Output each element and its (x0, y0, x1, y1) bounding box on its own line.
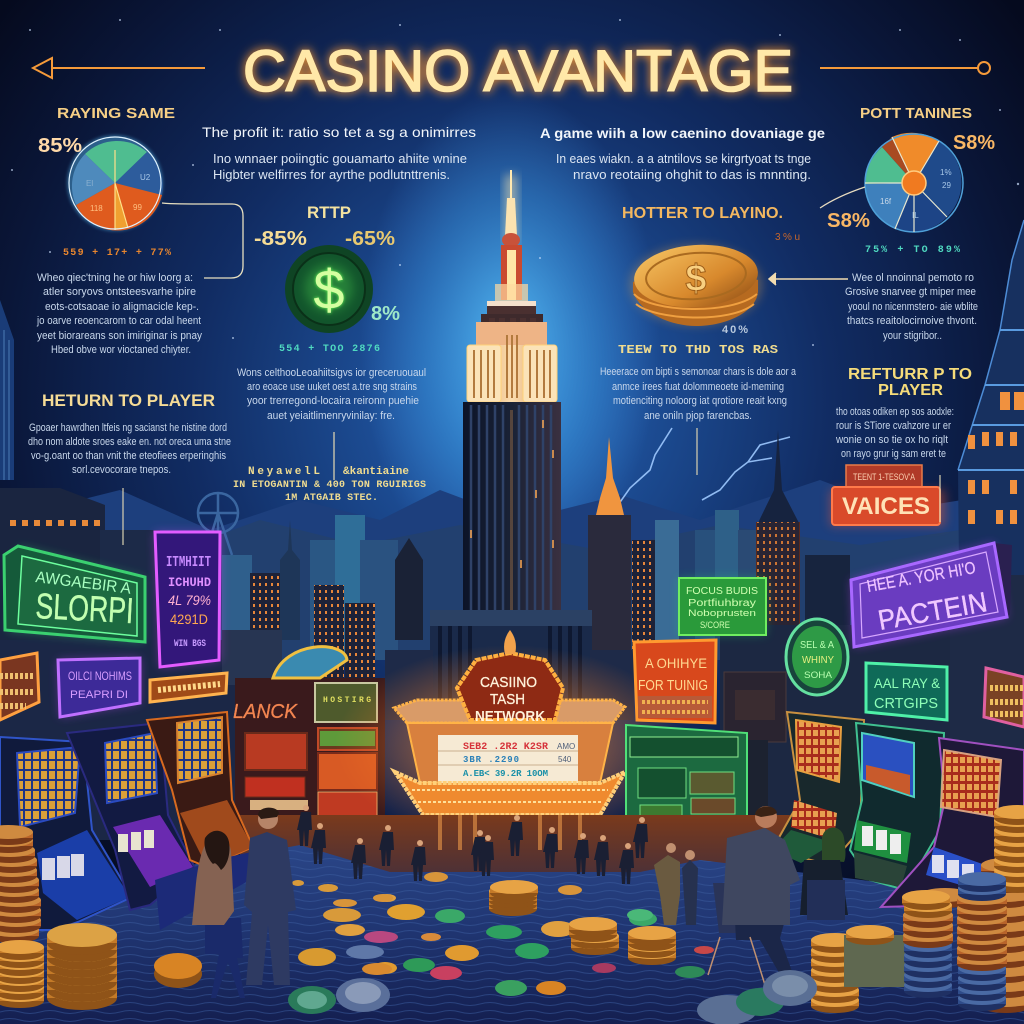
rtp body: auet yeiaitlimenryvinilay: fre. (267, 410, 395, 422)
rtp body: Wons celthooLeoahiitsigvs ior greceruouaul (237, 367, 426, 379)
text block: low casino advantage: nravo reotaiing ohghit to das is mnnting. (573, 168, 811, 182)
body text (36, 272, 202, 356)
callout: neyawell: &kantiaine (343, 466, 409, 478)
body: yooul no nicenmstero- aie wblite (848, 301, 978, 313)
rtp body: yoor trerregond-locaira reironn puehie (247, 395, 419, 407)
neon sign: purple tall: ITMHIIT (166, 554, 211, 571)
pie caption: 559 + 17+ + 77% (63, 248, 171, 259)
gold stack left edge (0, 825, 41, 943)
body text: eots-cotsaoae io aligmacicle kep-. (45, 301, 199, 313)
colonnade under marquee (240, 815, 790, 877)
pie chart right (865, 133, 963, 232)
neon sign: purple tall: 4291D (170, 611, 208, 627)
neon sign: purple tall: ICHUHD (168, 575, 211, 590)
body text: Wheo qiec'tning he or hiw loorg a: (37, 272, 193, 284)
icon: gold coin (630, 241, 762, 326)
right edge building (958, 220, 1024, 660)
neon word: lanck: LANCK (233, 701, 299, 723)
percent 85: 85% (38, 135, 82, 157)
body (600, 366, 797, 422)
sign: vaices: VAICES (842, 493, 930, 520)
neon sign: green slorpi (4, 546, 145, 642)
neon sign: green upper center: Portfiuhbray (688, 598, 756, 609)
heading: rttp: RTTP (307, 203, 351, 222)
small percent: 3%u (775, 232, 800, 243)
percent labels (827, 132, 995, 232)
pie chart left (67, 135, 163, 231)
percent labels: -65% (345, 228, 395, 250)
panel: return to player right (835, 366, 972, 460)
body: rour is STiore cvahzore ur er (836, 420, 951, 432)
blue and gold stacks front right (697, 872, 1007, 1024)
text block: low casino advantage: A game wiih a low caenino dovaniage ge (540, 125, 825, 141)
body (835, 406, 954, 460)
body: sorl.cevocorare tnepos. (72, 464, 171, 476)
lightning (618, 428, 790, 505)
text block: low casino advantage (540, 125, 825, 182)
casino marquee: A.EB< 39.2R 10OM (463, 769, 548, 779)
body: tho otoas odiken ep sos aodxle: (836, 406, 954, 418)
arrow: to coin (769, 273, 848, 285)
secondary tower right (588, 430, 800, 690)
rtp body (237, 367, 426, 422)
pie chart right: 29 (942, 181, 951, 190)
pie chart left: 118 (90, 204, 103, 213)
panel: return to player right: PLAYER (878, 382, 943, 399)
rainbow arch sign (273, 647, 347, 678)
person: seated man and woman right (654, 806, 848, 988)
percent labels: -85% (254, 228, 307, 250)
icon: gold coin: $ (685, 258, 707, 300)
neon sign: purple right (851, 543, 1012, 647)
slot machines right (772, 712, 1024, 907)
casino marquee: TASH (490, 691, 525, 708)
body: Heeerace om bipti s semonoar chars is dole aor a (600, 366, 797, 378)
body: wonie on so tie ox ho riqlt (835, 434, 948, 446)
neon sign: orange far right (984, 668, 1024, 727)
body: motienciting noloorg iat qrotiore reait kxng (613, 395, 787, 407)
panel: hotter to laying (622, 205, 848, 336)
casino marquee (335, 630, 685, 845)
heading: REFTURR P TO (848, 366, 972, 383)
vertical pointers (123, 428, 940, 545)
neon sign: green upper center: FOCUS BUDIS (686, 586, 758, 597)
body text: yeet biorareans son imiriginar is pnay (37, 330, 202, 342)
city skyline (222, 510, 850, 683)
neon sign: green upper center (679, 578, 766, 635)
casino marquee: 3BR .2290 (463, 755, 519, 765)
rtp caption: 554 + TOO 2876 (279, 344, 380, 355)
ferris wheel (198, 493, 238, 555)
pie chart left: U2 (140, 173, 151, 182)
body: Gpoaer hawrdhen ltfeis ng sacianst he nistine dord (29, 422, 227, 434)
icon: dollar chip: $ (313, 258, 345, 321)
neon sign: round green: WHINY (802, 655, 834, 666)
sign: vaices: TEENT 1-TESOV'A (853, 472, 915, 482)
percent labels: 8% (371, 303, 400, 325)
neon sign: orange center: A OHIHYE (645, 655, 707, 671)
casino marquee: 540 (558, 755, 572, 764)
panel: raying same (36, 105, 202, 356)
body (28, 422, 231, 476)
neon sign: green slorpi: SLORPI (35, 585, 135, 631)
mountains (0, 480, 1024, 660)
body: ane oniln pjop farencbas. (644, 410, 752, 422)
tower light halo (360, 90, 660, 590)
sign: vaices (830, 465, 945, 526)
panel: return to player left (28, 391, 231, 476)
body: vo-g.oant oo than vnit the eteofiees erperinghis (31, 450, 226, 462)
percent labels: S8% (827, 210, 870, 232)
text block: profit ratio: The profit it: ratio so tet a sg a onimirres (202, 124, 476, 140)
center coin stacks (489, 880, 676, 965)
neon sign: orange center: FOR TUINIG (638, 677, 708, 694)
text block: profit ratio: Ino wnnaer poiingtic gouamarto ahiite wnine (213, 152, 467, 166)
arrow: title right (820, 62, 990, 74)
green panels building (626, 672, 786, 840)
rtp body: aro eoace use uuket oest a.tre sng strains (247, 381, 417, 393)
body (845, 272, 978, 342)
icon: dollar chip (285, 245, 373, 333)
body: Wee ol nnoinnal pemoto ro (852, 272, 974, 284)
neon sign: purple right: PACTEIN (876, 586, 989, 636)
callout: neyawell: 1M ATGAIB STEC. (285, 493, 378, 504)
heading: TEEW TO THD TOS RAS (618, 343, 778, 357)
body: thatcs reaitolocirnoive thvont. (847, 315, 977, 327)
heading: HETURN TO PLAYER (42, 391, 215, 410)
pie chart left: El (86, 179, 93, 188)
pie chart right: 16f (880, 197, 892, 206)
neon sign: small purple: PEAPRI DI (70, 689, 128, 701)
text block: low casino advantage: In eaes wiakn. a a atntilovs se kirgrtyoat ts tnge (556, 152, 811, 166)
percent labels (254, 228, 400, 325)
neon sign: orange left (0, 653, 39, 720)
neon sign: round green: SOHA (804, 670, 832, 680)
back walls behind signs (0, 575, 1024, 840)
percent 40: 40% (722, 324, 748, 336)
neon sign: green slorpi: AWGAEBIR A (35, 569, 132, 598)
callout: neyawell: IN ETOGANTIN & 400 TON RGUIRIGS (233, 480, 426, 491)
left edge buildings (0, 300, 160, 660)
icon: dollar chip: $ (313, 258, 345, 321)
left panels building (233, 647, 385, 838)
body: on rayo grur ig sam eret te (841, 448, 946, 460)
casino base building (385, 610, 634, 720)
pie chart right: IL (912, 211, 919, 220)
neon sign: purple tall: 4L 79% (168, 592, 211, 608)
casino marquee: AMO (557, 742, 575, 751)
pie chart right: 1% (940, 168, 952, 177)
panel: pott tanines (820, 105, 995, 342)
pie chart left: 99 (133, 203, 142, 212)
neon sign: orange bar (150, 673, 227, 702)
body text: atler soryovs ontsteesvarhe ipire (43, 286, 196, 298)
title: CASINO AVANTAGE (243, 39, 793, 104)
central skyscraper (463, 170, 561, 614)
neon sign: small purple: OILCI NOHIMS (68, 669, 132, 683)
body: your stigribor.. (883, 330, 942, 342)
stars (11, 19, 1019, 346)
heading: POTT TANINES (860, 105, 972, 122)
sign text: CASIINO (480, 674, 537, 691)
neon sign: purple tall (155, 532, 220, 667)
callout: neyawell (233, 432, 426, 504)
percent labels: S8% (953, 132, 995, 154)
neon sign: green rect right: AAL RAY & (874, 675, 941, 691)
body text: jo oarve reoencarom to car odal heent (36, 315, 201, 327)
arrow: title left (33, 58, 205, 78)
gold stack right edge (981, 805, 1024, 1013)
small green sign text: HOSTIRG (323, 696, 371, 705)
callout: neyawell: NeyawelL (248, 466, 320, 478)
body: dho nom aldote sroes eake en. not oreca uma stne (28, 436, 231, 448)
panel: teew to the (600, 343, 797, 422)
panel: rtp (237, 203, 426, 422)
neon sign: green rect right: CRTGIPS (874, 695, 938, 712)
neon sign: round green (786, 619, 848, 695)
text block: profit ratio: Higbter welfirres for ayrthe podlutnttrenis. (213, 168, 450, 182)
neon sign: small purple (58, 658, 140, 717)
pie caption: 75% + TO 89% (865, 245, 960, 256)
title: CASINO AVANTAGE (243, 39, 793, 104)
casino marquee: NETWORK (475, 708, 545, 725)
gold stack front left (0, 923, 117, 1010)
heading: HOTTER TO LAYINO. (622, 205, 783, 222)
small crowd (297, 805, 648, 884)
body text: Hbed obve wor vioctaned chiyter. (51, 344, 191, 356)
neon sign: purple right: HEE A. YOR HI'O (865, 558, 977, 596)
marquee lines: SEB2 .2R2 K2SR (463, 742, 548, 753)
ground (0, 845, 1024, 1024)
body: anmce irees fuat dolommeoete id-meming (612, 381, 784, 393)
neon sign: green upper center: S/CORE (700, 620, 730, 630)
body: Grosive snarvee gt miper mee (845, 286, 976, 298)
heading: raying same: RAYING SAME (57, 105, 175, 122)
chips on floor (154, 872, 714, 1014)
neon sign: orange center (634, 640, 716, 723)
neon sign: green upper center: Noboprusten (688, 608, 756, 618)
person: man and woman left (192, 808, 296, 998)
neon sign: purple tall: WIN BGS (174, 639, 206, 650)
slot machines left (0, 712, 260, 930)
neon sign: round green: SEL & A (800, 640, 834, 651)
connector line (162, 203, 243, 278)
text block: profit ratio (202, 124, 476, 182)
neon sign: green rect right (866, 663, 947, 720)
